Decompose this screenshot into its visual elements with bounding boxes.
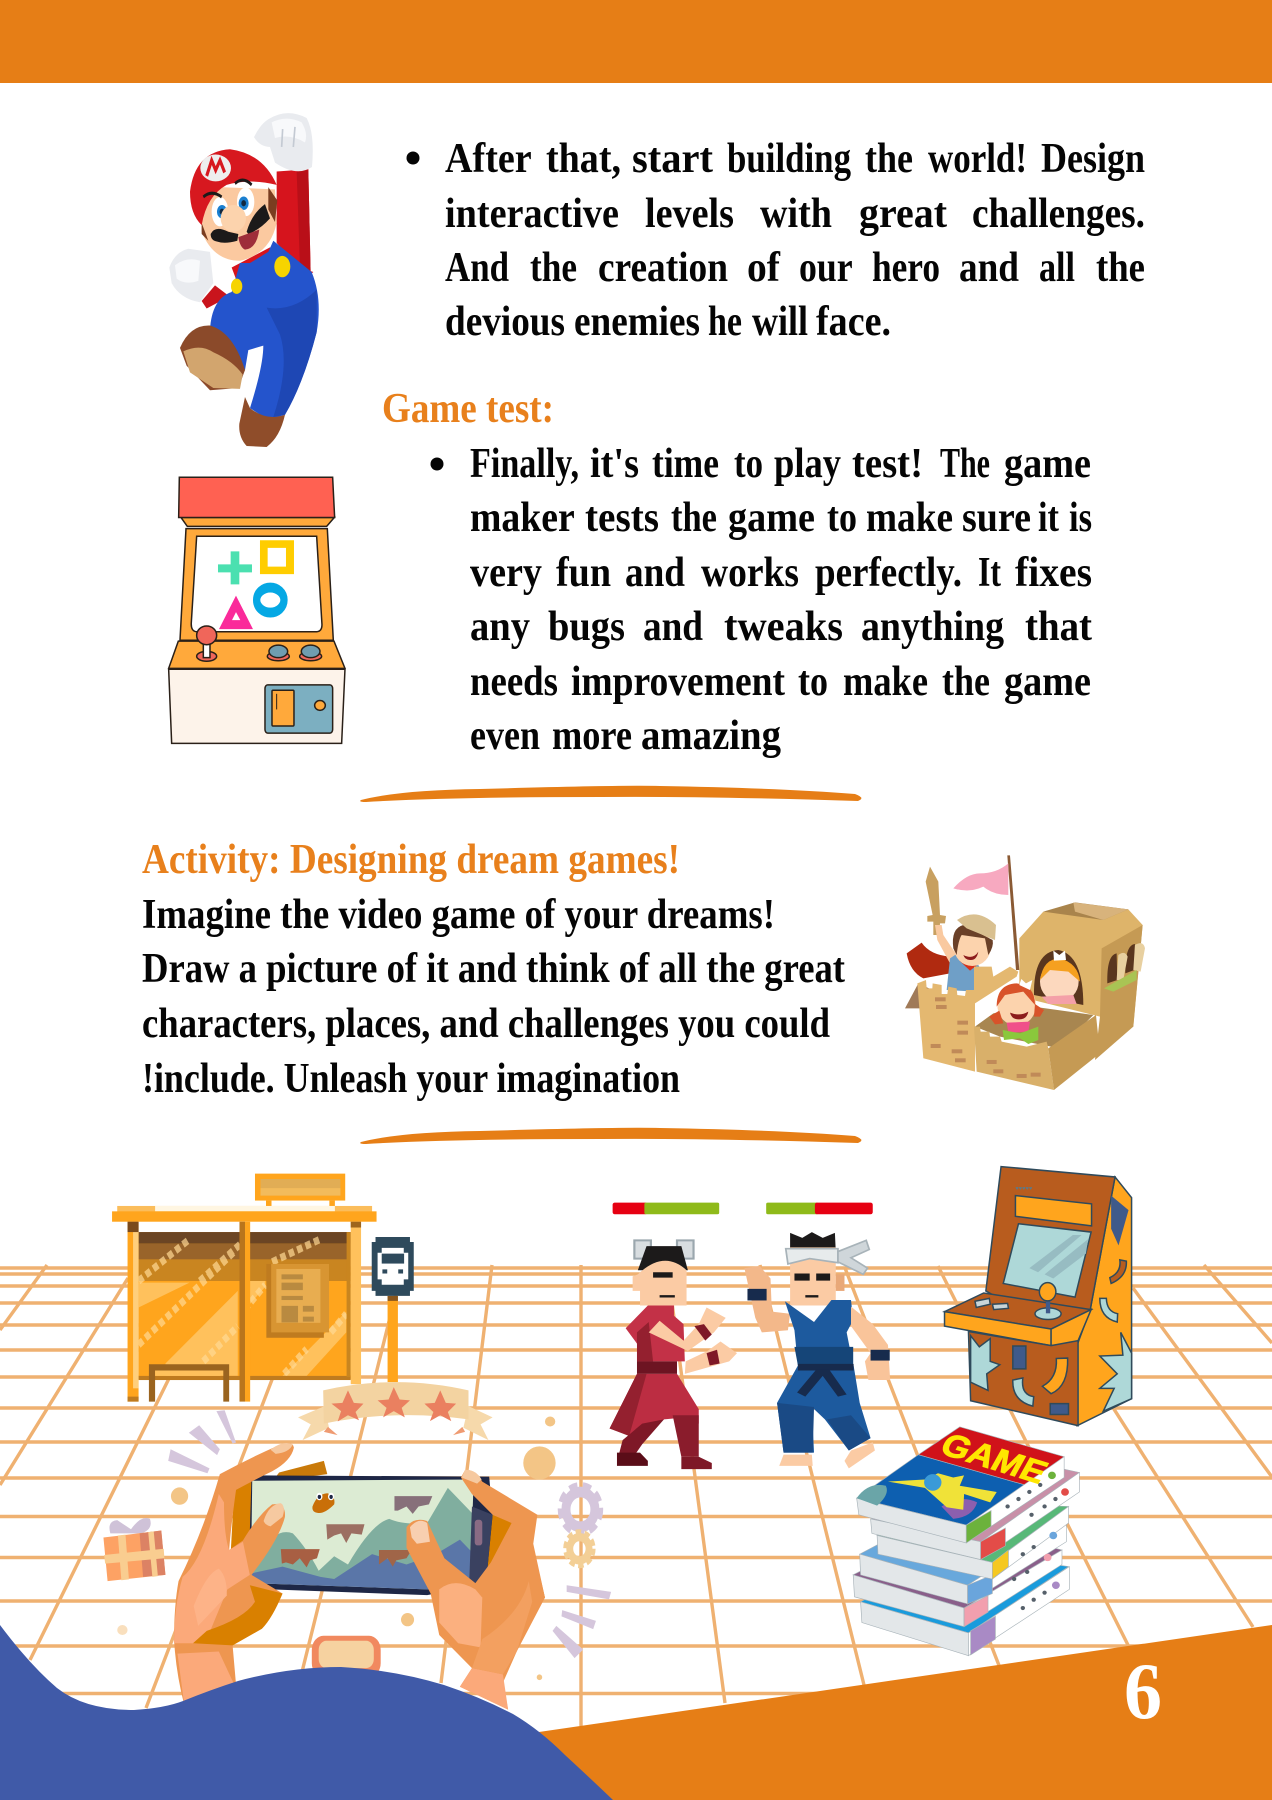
bullet text: building the world: will (752, 299, 808, 345)
bullet text: play test: amazing (641, 713, 781, 759)
bullet text: play test: that (1025, 604, 1092, 650)
bullet text: play test: tests (585, 495, 659, 541)
illustration: stack of game books (853, 1427, 1079, 1656)
bullet text: building the world: the (1096, 245, 1145, 291)
bullet text: building the world: he (708, 299, 742, 345)
bullet text: building the world: the (865, 136, 913, 182)
bullet text: play test: it (1038, 495, 1059, 541)
bullet text: play test: the (942, 659, 990, 705)
bullet text: building the world: world! (928, 136, 1027, 182)
bullet text: building the world: creation (598, 245, 728, 291)
bullet text: building the world: devious (445, 299, 565, 345)
bullet text: play test: more (552, 713, 632, 759)
icon: star banner (298, 1382, 493, 1440)
bullet text: play test: fixes (1015, 550, 1092, 596)
bullet text: play test: game (1004, 441, 1091, 487)
left hand (174, 1443, 294, 1705)
bullet text: play test: make (866, 495, 953, 541)
bullet text: play test: to (798, 659, 828, 705)
bullet text: play test: maker (470, 495, 574, 541)
bullet text: building the world: the (530, 245, 577, 291)
bullet text: play test (430, 441, 1092, 759)
bullet text: building the world: Design (1041, 136, 1145, 182)
divider swoosh upper (360, 786, 861, 802)
bullet text: building the world: all (1039, 245, 1075, 291)
bullet text: play test: time (652, 441, 719, 487)
bullet text: play test: to (827, 495, 857, 541)
icon: gift box (103, 1518, 165, 1581)
bullet text: play test: even (470, 713, 540, 759)
bullet text: play test: game (728, 495, 815, 541)
illustration: pixel bus shelter (112, 1174, 377, 1402)
bullet text: building the world: and (959, 245, 1019, 291)
bullet text: building the world: building (727, 136, 851, 182)
bullet text: play test: fun (556, 550, 611, 596)
bullet text: play test: any (470, 604, 530, 650)
bullet text: play test: anything (861, 604, 1004, 650)
orange bottom corner panel (450, 1625, 1272, 1800)
icon: children in cardboard castle (905, 855, 1145, 1090)
bullet text: play test: Finally, (470, 441, 579, 487)
top game book (857, 1427, 1064, 1543)
background perspective grid floor (0, 1265, 1272, 1726)
right hand (407, 1470, 545, 1710)
bullet text: play test: it's (590, 441, 639, 487)
bullet text: play test: the (671, 495, 717, 541)
bullet text: play test: and (643, 604, 703, 650)
bullet text: play test: The (940, 441, 990, 487)
illustration: red pixel fighter (610, 1240, 737, 1469)
bullet text: play test: works (701, 550, 799, 596)
page number: 6 (1124, 1648, 1162, 1736)
activity body text (142, 892, 845, 1102)
bullet text: building the world: challenges. (972, 191, 1145, 237)
book 4 (877, 1502, 1068, 1579)
bullet text: building the world: And (445, 245, 509, 291)
bullet text: play test: tweaks (724, 604, 843, 650)
bullet text: play test: perfectly. (815, 550, 962, 596)
bullet text: building the world: that, (546, 136, 621, 182)
bullet text: play test: is (1069, 495, 1092, 541)
activity body text: Imagine the video game of your dreams! (142, 892, 775, 938)
activity body text: !include. Unleash your imagination (142, 1056, 680, 1102)
bullet text: play test: It (978, 550, 1001, 596)
bullet text: play test: game (1004, 659, 1091, 705)
illustration: arcade machine side view (945, 1167, 1132, 1426)
health bar: right fighter (766, 1203, 873, 1214)
bullet text: play test: needs (470, 659, 558, 705)
divider swoosh lower (360, 1128, 861, 1144)
health bar: left fighter (613, 1203, 719, 1214)
activity body text: Draw a picture of it and think of all the great (142, 946, 845, 992)
bullet text: play test: and (625, 550, 685, 596)
bullet text: building the world: After (445, 136, 531, 182)
bullet text: building the world: hero (872, 245, 940, 291)
bullet text: building the world: face. (816, 299, 891, 345)
bullet text: building the world: with (760, 191, 832, 237)
illustration: hands holding a smartphone game (174, 1443, 545, 1710)
book 2 (853, 1523, 1062, 1627)
heading: Activity: Activity: Designing dream games! (142, 837, 680, 883)
bullet text: building the world: our (799, 245, 852, 291)
bullet text: play test: test! (852, 441, 923, 487)
bottom book (861, 1550, 1069, 1656)
illustration: blue pixel fighter (744, 1232, 890, 1468)
bullet text: play test: bugs (548, 604, 625, 650)
icon: arcade cabinet with shapes (169, 477, 345, 743)
bullet text: play test: sure (962, 495, 1031, 541)
bullet text: building the world: start (632, 136, 713, 182)
phone (248, 1475, 493, 1595)
book 5 (871, 1469, 1079, 1560)
bullet text: play test: improvement (571, 659, 785, 705)
heading: Game test: Game test: (382, 386, 554, 432)
blue wave corner (0, 1625, 613, 1800)
bullet text: building the world: enemies (574, 299, 700, 345)
bullet text: play test: to (734, 441, 763, 487)
bullet text: building the world (406, 136, 1145, 345)
bullet text: building the world: of (747, 245, 781, 291)
decorative dots and sparks around phone (117, 1410, 611, 1680)
illustration: arcade machine side view: ♥♥♥♥♥ (1015, 1186, 1032, 1192)
icon: Mario jumping (169, 113, 319, 447)
top orange band (0, 0, 1272, 83)
bullet text: play test: very (470, 550, 542, 596)
book 3 (860, 1502, 1066, 1604)
bullet text: building the world: great (859, 191, 947, 237)
icon: bus stop sign (372, 1237, 414, 1382)
illustration: stack of game books: GAME (934, 1427, 1053, 1491)
bullet text: play test: play (774, 441, 841, 487)
activity body text: characters, places, and challenges you could (142, 1001, 830, 1047)
bullet text: play test: make (843, 659, 928, 705)
bullet text: building the world: interactive (445, 191, 619, 237)
bullet text: building the world: levels (645, 191, 734, 237)
